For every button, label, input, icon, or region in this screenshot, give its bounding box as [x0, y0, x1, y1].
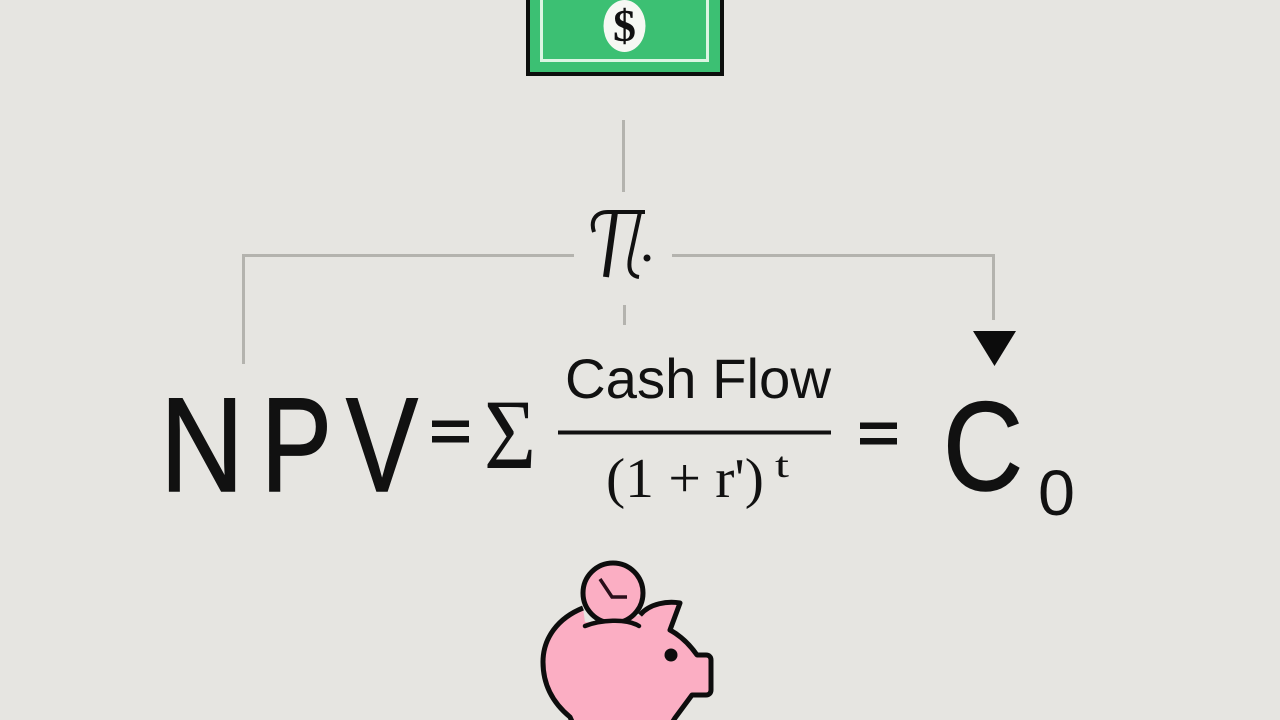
formula: NPV = sigma cash flow over discount factor = C0	[160, 347, 1075, 529]
icon: green dollar banknote: $	[613, 0, 636, 51]
icon: green dollar banknote	[528, 0, 722, 74]
formula term: NPV: N	[160, 371, 244, 520]
connector: vertical line from banknote to pi	[622, 120, 625, 192]
clock coin	[583, 563, 643, 623]
arrowhead pointing to C0	[973, 331, 1016, 366]
numerator: Cash Flow: Cash Flow	[565, 347, 832, 410]
denominator exponent t: t	[775, 445, 789, 485]
fraction bar	[558, 430, 831, 434]
formula term: NPV: P	[261, 371, 332, 520]
formula term: NPV: V	[346, 371, 418, 520]
piggy eye	[664, 648, 678, 662]
formula term: NPV	[160, 371, 418, 520]
icon: pi symbol	[593, 212, 650, 277]
equals sign: left	[432, 420, 469, 442]
equals sign: right	[860, 422, 897, 444]
connector: left bracket from pi to NPV	[244, 256, 574, 364]
piggy body fill	[543, 602, 711, 720]
denominator: discount factor: (1 + r')	[606, 448, 764, 510]
formula term: C: C	[943, 376, 1023, 517]
connector: right bracket from pi to C0	[672, 256, 994, 320]
icon: pink piggy bank with clock coin	[543, 563, 711, 720]
connector: short vertical tick below pi	[623, 305, 626, 325]
clock hands	[600, 579, 627, 597]
formula subscript: 0: 0	[1038, 457, 1075, 529]
coin slot line	[585, 621, 639, 626]
summation symbol: Σ	[484, 379, 536, 490]
piggy body outline	[543, 602, 711, 720]
